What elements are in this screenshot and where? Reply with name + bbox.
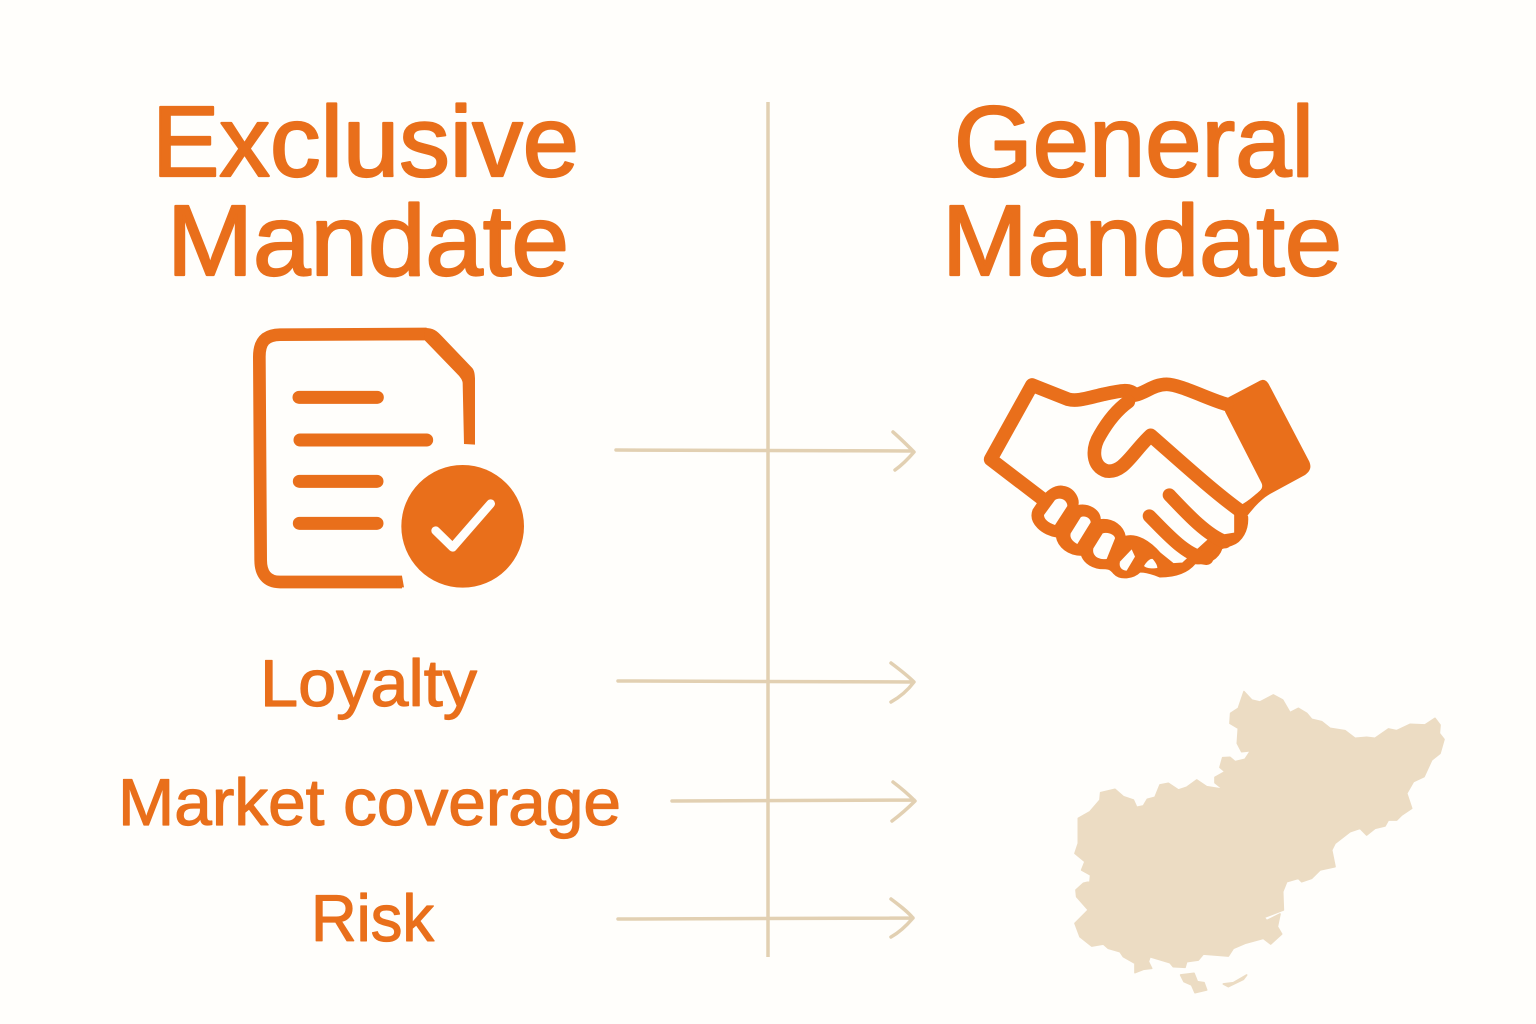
heading: Exclusive Mandate: Exclusive	[152, 86, 579, 198]
fingers of right hand	[1149, 495, 1225, 558]
arrow: loyalty	[618, 663, 914, 702]
arrow: market coverage	[672, 782, 915, 821]
heading: Exclusive Mandate	[152, 86, 579, 297]
outline of left hand and top of right hand	[991, 384, 1227, 498]
label: Risk: Risk	[311, 881, 435, 955]
central vertical divider	[766, 102, 770, 957]
label: Loyalty: Loyalty	[260, 646, 477, 720]
arrow: document to handshake	[616, 432, 914, 470]
map: territory silhouette	[1075, 692, 1444, 993]
icon: check badge	[401, 465, 524, 588]
arrow: risk	[618, 899, 913, 937]
thumb and knuckle line	[1094, 402, 1240, 511]
heading: General Mandate: Mandate	[942, 185, 1342, 297]
heading: General Mandate	[942, 86, 1342, 297]
icon: handshake	[991, 380, 1310, 578]
label: Market coverage: Market coverage	[118, 765, 621, 839]
heading: Exclusive Mandate: Mandate	[167, 185, 569, 297]
icon: document with check mark	[259, 328, 524, 588]
heading: General Mandate: General	[954, 86, 1314, 198]
gaps between fingers of left hand	[1044, 499, 1067, 525]
shirt cuff	[1225, 380, 1310, 517]
finger cluster	[1032, 486, 1247, 578]
